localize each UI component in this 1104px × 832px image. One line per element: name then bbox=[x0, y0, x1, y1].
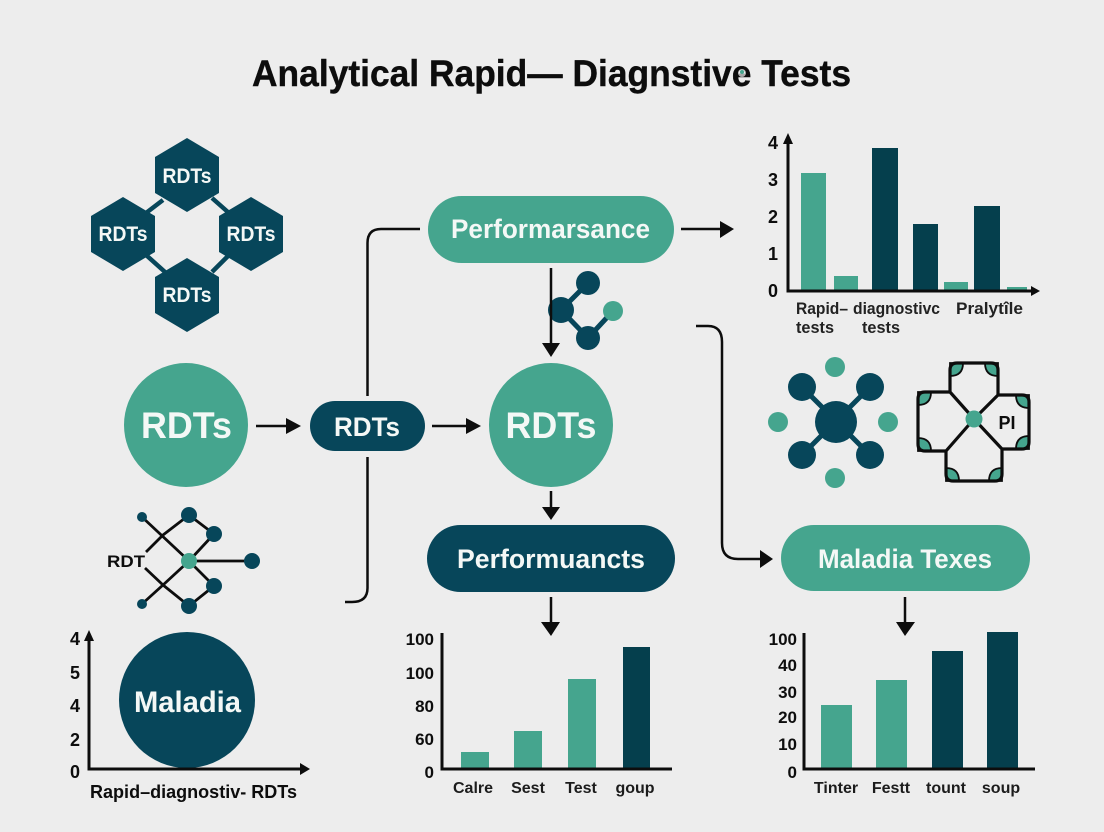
bar chart: right: Festt bbox=[872, 780, 911, 797]
icon: RDT network: RDT bbox=[107, 552, 146, 571]
bar chart: top right: tests bbox=[796, 319, 834, 337]
hexagon cluster: RDTs: RDTs bbox=[98, 223, 148, 246]
bar chart: middle: goup bbox=[615, 780, 655, 797]
pill: Maladia Texes bbox=[781, 525, 1030, 591]
circle: RDTs center bbox=[489, 363, 613, 487]
hexagon cluster: RDTs: RDTs bbox=[162, 165, 212, 188]
bar chart: middle: 80 bbox=[415, 697, 434, 716]
icon: PI cross diagram bbox=[918, 363, 1029, 481]
chart: Maladia circle axes: 5 bbox=[70, 663, 80, 683]
arrow: Performance to top chart bbox=[681, 221, 734, 238]
pill: Performance bbox=[428, 196, 674, 263]
chart: Maladia circle axes: Maladia bbox=[134, 686, 241, 719]
icon: PI cross diagram: PI bbox=[998, 413, 1016, 433]
chart: Maladia circle axes: Rapid–diagnostiv- RDTs bbox=[90, 782, 297, 802]
pill: RDTs bbox=[310, 401, 425, 451]
bar chart: middle bbox=[406, 630, 672, 797]
chart: Maladia circle axes bbox=[70, 629, 310, 802]
connector: up to Performance bbox=[368, 229, 420, 396]
bar chart: middle: Test bbox=[565, 780, 598, 797]
bar chart: top right: 0 bbox=[768, 281, 778, 301]
bar chart: top right: 4 bbox=[768, 133, 778, 153]
bar chart: right: tount bbox=[926, 780, 967, 797]
pill: RDTs: RDTs bbox=[334, 412, 400, 442]
circle: RDTs center: RDTs bbox=[506, 405, 596, 446]
chart: Maladia circle axes: 0 bbox=[70, 762, 80, 782]
hexagon cluster: RDTs: RDTs bbox=[226, 223, 276, 246]
arrow: Maladia Texes to right chart bbox=[896, 597, 915, 636]
bar chart: top right: diagnostivc bbox=[853, 300, 940, 318]
bar chart: right: soup bbox=[982, 780, 1020, 797]
arrow: center circle to Performuancts bbox=[542, 491, 560, 520]
bar chart: top right: Rapid– bbox=[796, 300, 848, 318]
hexagon cluster: RDTs bbox=[91, 138, 283, 332]
bar chart: right: 0 bbox=[788, 763, 797, 782]
icon: molecule bbox=[548, 271, 623, 350]
pill: Maladia Texes: Maladia Texes bbox=[818, 544, 992, 574]
bar chart: right: 20 bbox=[778, 708, 797, 727]
chart: Maladia circle axes: 4 bbox=[70, 696, 80, 716]
pill: Performuancts: Performuancts bbox=[457, 544, 645, 574]
bar chart: top right: tests bbox=[862, 319, 900, 337]
arrow: Performance to center circle bbox=[542, 268, 560, 357]
bar chart: right bbox=[769, 630, 1035, 797]
chart: Maladia circle axes: 2 bbox=[70, 730, 80, 750]
bar chart: middle: Calre bbox=[453, 780, 493, 797]
bar chart: top right: 3 bbox=[768, 170, 778, 190]
pill: Performance: Performarsance bbox=[451, 214, 650, 244]
bar chart: right: 40 bbox=[778, 656, 797, 675]
arrow: Performuancts to middle chart bbox=[541, 597, 560, 636]
hexagon cluster: RDTs: RDTs bbox=[162, 284, 212, 307]
bar chart: top right bbox=[768, 133, 1040, 337]
icon: RDT network bbox=[107, 507, 260, 614]
bar chart: middle: 100 bbox=[406, 664, 434, 683]
bar chart: top right: Pralytîle bbox=[956, 300, 1023, 318]
bar chart: middle: Sest bbox=[511, 780, 546, 797]
circle: RDTs left bbox=[124, 363, 248, 487]
chart: Maladia circle axes: 4 bbox=[70, 629, 80, 649]
bar chart: right: 10 bbox=[778, 735, 797, 754]
bar chart: right: 100 bbox=[769, 630, 797, 649]
arrow: circle to pill bbox=[256, 418, 301, 434]
icon: hub network bbox=[768, 357, 898, 488]
bar chart: right: 30 bbox=[778, 683, 797, 702]
circle: RDTs left: RDTs bbox=[141, 405, 232, 446]
bar chart: top right: 1 bbox=[768, 244, 778, 264]
bar chart: top right: 2 bbox=[768, 207, 778, 227]
bar chart: middle: 0 bbox=[425, 763, 434, 782]
connector arrow: to Maladia Texes bbox=[696, 326, 773, 568]
bar chart: middle: 100 bbox=[406, 630, 434, 649]
title: Analytical Rapid— Diagnstive Tests bbox=[252, 53, 851, 94]
bar chart: right: Tinter bbox=[814, 780, 858, 797]
arrow: pill to center circle bbox=[432, 418, 481, 434]
connector: down from RDTs pill bbox=[345, 457, 368, 602]
bar chart: middle: 60 bbox=[415, 730, 434, 749]
pill: Performuancts bbox=[427, 525, 675, 592]
